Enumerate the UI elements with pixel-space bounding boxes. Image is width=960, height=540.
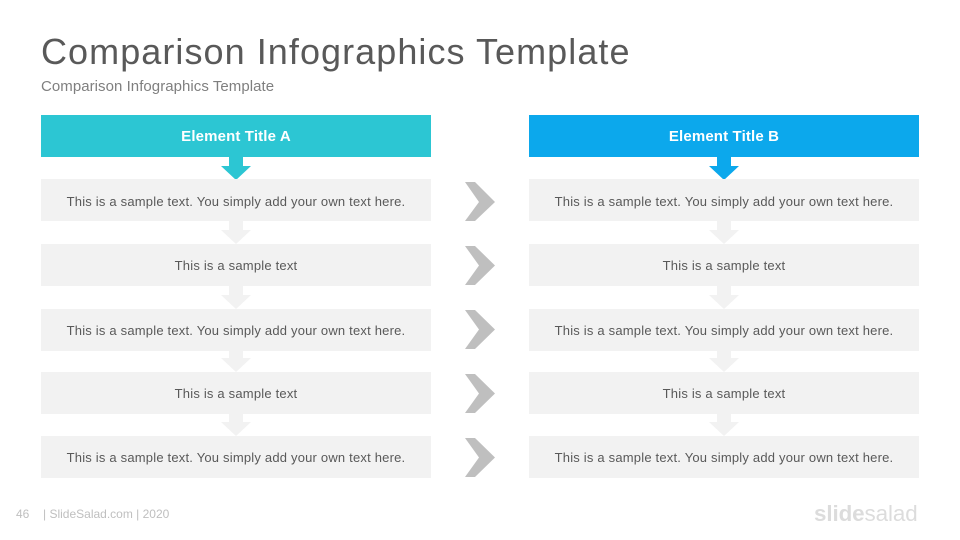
row A5: This is a sample text. You simply add your own text here.	[67, 450, 405, 465]
panel: element B header: Element Title B	[669, 128, 779, 145]
footer text: | SlideSalad.com | 2020	[43, 507, 169, 521]
panel: element B header	[529, 115, 919, 157]
row A1: This is a sample text. You simply add your own text here.	[67, 194, 405, 209]
row A1	[41, 179, 431, 221]
row A2: This is a sample text	[175, 258, 297, 273]
row B2	[529, 244, 919, 286]
panel: element A header: Element Title A	[181, 128, 291, 145]
row B5: This is a sample text. You simply add your own text here.	[555, 450, 893, 465]
row B3: This is a sample text. You simply add your own text here.	[555, 323, 893, 338]
row B4	[529, 372, 919, 414]
row A5	[41, 436, 431, 478]
row B5	[529, 436, 919, 478]
row B1	[529, 179, 919, 221]
title: Comparison Infographics Template	[41, 31, 631, 72]
row B4: This is a sample text	[663, 386, 785, 401]
row B1: This is a sample text. You simply add your own text here.	[555, 194, 893, 209]
row A3: This is a sample text. You simply add your own text here.	[67, 323, 405, 338]
row B2: This is a sample text	[663, 258, 785, 273]
row A4: This is a sample text	[175, 386, 297, 401]
row B3	[529, 309, 919, 351]
row A3	[41, 309, 431, 351]
subtitle: Comparison Infographics Template	[41, 78, 274, 95]
row A4	[41, 372, 431, 414]
panel: element A header	[41, 115, 431, 157]
logo: slidesalad: slidesalad	[814, 501, 918, 526]
row A2	[41, 244, 431, 286]
page number: 46	[16, 507, 29, 521]
